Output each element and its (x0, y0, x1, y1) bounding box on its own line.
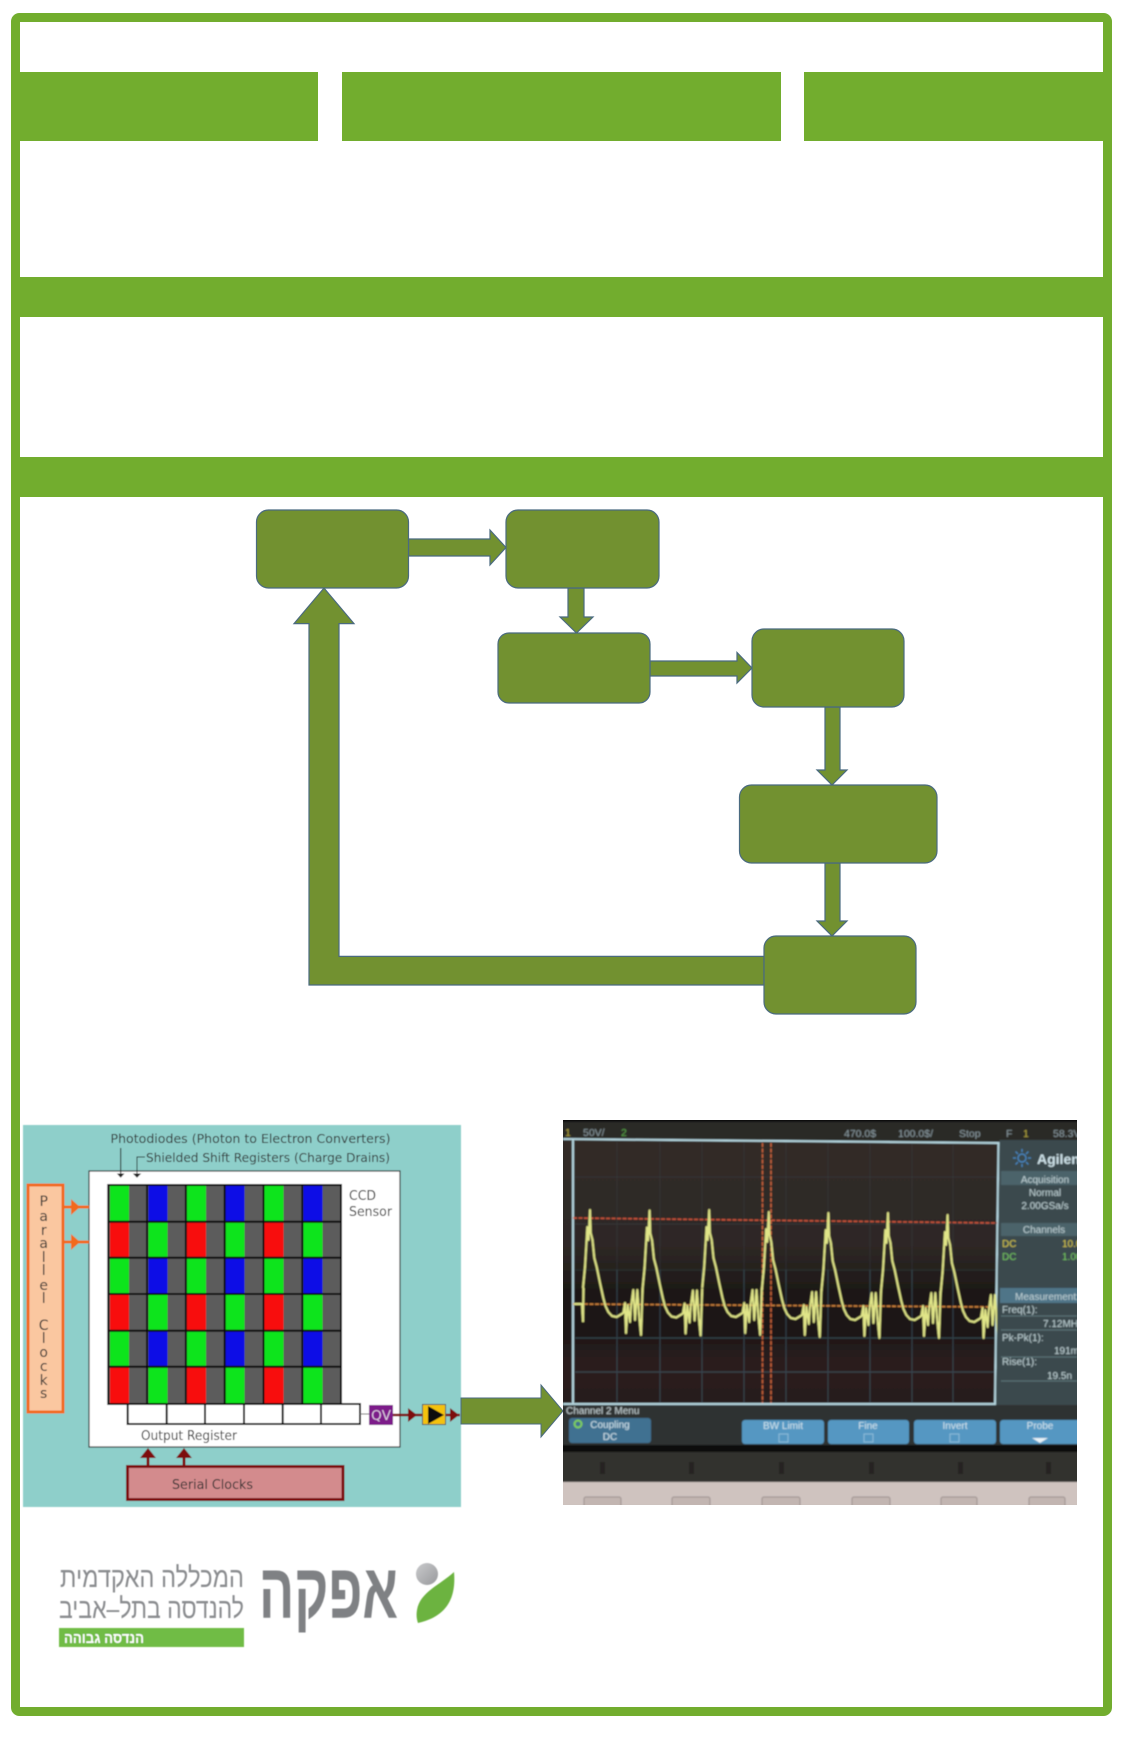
parallel clocks block (28, 1185, 63, 1412)
pixel grid (108, 1185, 341, 1404)
shift register label: Shielded Shift Registers (Charge Drains) (146, 1150, 390, 1165)
pointer lines (118, 1148, 145, 1177)
header bar: middle (342, 72, 781, 141)
sensor label: Sensor (349, 1204, 392, 1220)
parallel clocks block: C (39, 1318, 49, 1334)
side measurement panel: 19.5n (1047, 1371, 1072, 1382)
side measurement panel (996, 1140, 1082, 1406)
side measurement panel: 10.0 (1062, 1239, 1082, 1250)
side measurement panel: 7.12MH (1043, 1319, 1078, 1330)
section heading bar 2 (20, 457, 1103, 497)
side measurement panel: Freq(1): (1002, 1305, 1038, 1316)
top status strip: 2 (621, 1127, 627, 1139)
side measurement panel: DC (1002, 1239, 1016, 1250)
top status strip: 1 (565, 1127, 571, 1139)
sensor label (349, 1188, 392, 1220)
arrow: box 5 to box 6 (817, 863, 847, 936)
logo: grey dot (416, 1563, 438, 1585)
photodiode label: Photodiodes (Photon to Electron Converters) (110, 1131, 390, 1146)
flow box 5 (740, 785, 937, 863)
top status strip: 100.0$/ (898, 1128, 933, 1140)
side measurement panel: 2.00GSa/s (1021, 1201, 1069, 1212)
logo: wordmark: אפקה (259, 1547, 398, 1635)
parallel clocks block: c (40, 1359, 48, 1375)
header bar: left (20, 72, 318, 141)
serial clock arrows (140, 1448, 192, 1466)
signal connector line (360, 1413, 369, 1415)
logo: college name line 2: להנדסה בתל–אביב (59, 1593, 244, 1624)
top status strip (563, 1120, 1077, 1140)
sensor label: CCD (349, 1188, 376, 1204)
oscilloscope photo (560, 1118, 1083, 1509)
serial clocks block: Serial Clocks (172, 1477, 253, 1493)
parallel clocks block: k (40, 1373, 49, 1389)
side measurement panel: Measurement: (1015, 1292, 1079, 1303)
output signal arrows (393, 1408, 460, 1422)
trigger and cursor lines (573, 1143, 997, 1403)
logo: green tag (59, 1628, 244, 1647)
arrow: sensor to oscilloscope (461, 1385, 563, 1437)
side measurement panel: Agilen (1037, 1151, 1080, 1167)
softkey menu: DC (603, 1432, 617, 1443)
parallel clocks block: l (42, 1291, 46, 1307)
arrow: box 1 to box 2 (408, 530, 506, 565)
side measurement panel: 1.00 (1062, 1252, 1082, 1263)
parallel clocks block: l (42, 1331, 46, 1347)
side measurement panel: Normal (1029, 1188, 1061, 1199)
parallel clocks block: l (42, 1250, 46, 1266)
side measurement panel: Pk-Pk(1): (1002, 1333, 1044, 1344)
arrow: feedback loop box 6 to box 1 (294, 588, 764, 985)
plot area (563, 1139, 998, 1404)
arrow: box 2 to box 3 (560, 588, 593, 633)
flow box 6 (764, 936, 916, 1014)
side measurement panel: Rise(1): (1002, 1357, 1037, 1368)
QV output block (369, 1405, 393, 1425)
softkey menu: Fine (858, 1421, 878, 1432)
softkey menu: Invert (942, 1421, 968, 1432)
flow box 4 (752, 629, 904, 707)
parallel clocks block: a (39, 1236, 48, 1252)
output register (128, 1404, 360, 1424)
top status strip: 50V/ (583, 1127, 605, 1139)
amplifier (422, 1404, 446, 1424)
softkey menu: Coupling (590, 1420, 630, 1431)
college logo (59, 1547, 454, 1647)
logo: leaf (417, 1572, 454, 1623)
top status strip: Stop (959, 1128, 981, 1140)
top status strip: 470.0$ (844, 1128, 876, 1140)
bezel (560, 1445, 1080, 1509)
parallel clocks block: a (39, 1209, 48, 1225)
top status strip: 1 (1023, 1128, 1029, 1140)
parallel clocks block: P (39, 1194, 48, 1210)
top status strip: 58.3V (1053, 1128, 1080, 1140)
parallel clocks block: e (39, 1278, 48, 1294)
side measurement panel: DC (1002, 1252, 1016, 1263)
flow box 2 (506, 510, 659, 588)
logo: college name line 1: המכללה האקדמית (60, 1562, 244, 1593)
output register label: Output Register (141, 1428, 237, 1444)
scope body (563, 1120, 1077, 1446)
flow box 3 (498, 633, 650, 703)
parallel clocks block: r (41, 1223, 47, 1239)
softkey menu: BW Limit (763, 1421, 803, 1432)
side measurement panel: Acquisition (1021, 1175, 1069, 1186)
logo: green tag: הנדסה גבוהה (64, 1630, 144, 1647)
flow box 1 (256, 510, 408, 588)
header bar: right (804, 72, 1103, 141)
QV output block: QV (371, 1408, 392, 1424)
parallel clock arrows (64, 1199, 89, 1250)
section heading bar 1 (20, 277, 1103, 317)
arrow: box 4 to box 5 (817, 707, 847, 785)
softkey menu (563, 1405, 1083, 1446)
side measurement panel: 191m (1054, 1346, 1079, 1357)
parallel clocks block: l (42, 1263, 46, 1279)
serial clocks block (128, 1466, 343, 1500)
softkey menu: Probe (1027, 1421, 1054, 1432)
softkey menu: Channel 2 Menu (566, 1406, 639, 1417)
parallel clocks block: s (40, 1386, 47, 1402)
arrow: box 3 to box 4 (650, 652, 752, 683)
waveform trace (574, 1210, 1000, 1340)
sensor body (89, 1171, 400, 1447)
side measurement panel: Channels (1023, 1225, 1065, 1236)
CCD sensor diagram (23, 1125, 461, 1507)
diagram background (23, 1125, 461, 1507)
flow diagram (256, 510, 937, 1014)
top status strip: F (1006, 1128, 1012, 1140)
parallel clocks block: o (39, 1345, 48, 1361)
